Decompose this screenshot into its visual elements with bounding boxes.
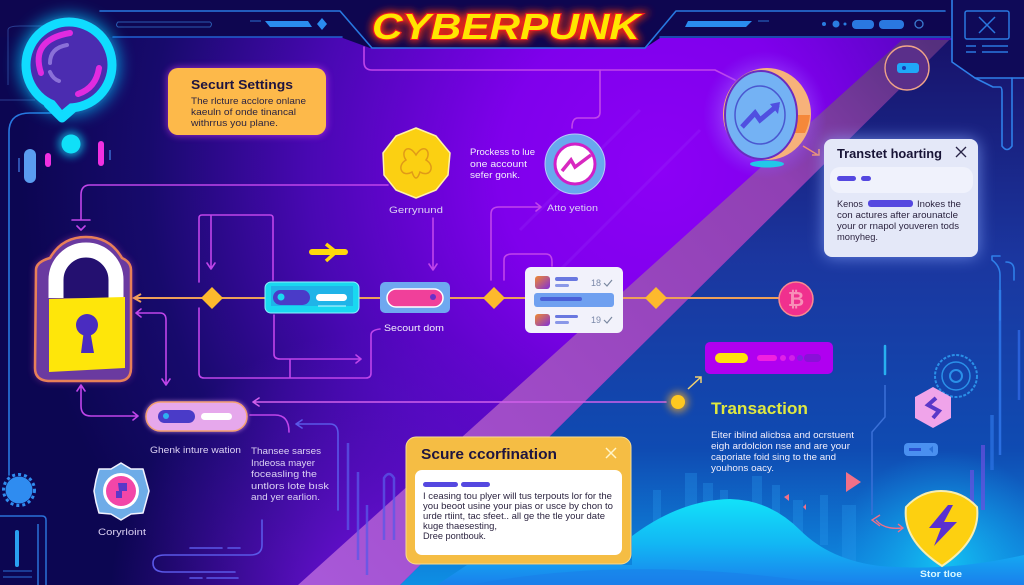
heading: transaction: Transaction [711,400,808,418]
text block: process note: sefer gonk. [470,170,520,181]
label: badge caption: Gerrynund [389,205,443,216]
icon: bitcoin [779,282,813,316]
icon: tech circle [935,355,977,397]
icon: trend circle [545,134,605,194]
panel: transaction hoarding: Inokes the [917,199,961,209]
icon: small toggle circle [885,46,929,90]
city skyline [653,473,856,565]
label: trend caption: Atto yetion [547,203,598,214]
top navigation bar [0,0,1024,48]
status indicators [19,131,110,183]
panel: secure settings: withrrus you plane. [190,118,278,128]
cyan wave [437,499,1024,585]
icon: hexagon bolt [915,387,951,428]
text block: transaction note: Indeosa mayer [251,458,315,469]
panel: transaction list: 18 [591,278,601,288]
title: CYBERPUNK [372,6,644,47]
text block: process note: one account [470,159,527,170]
label: pill caption: Ghenk inture wation [150,445,241,456]
text block: transaction note: foceasling the [251,469,317,480]
text block: transaction note: untlors lote bısk [251,481,329,492]
flow node: diamond one [201,287,223,309]
panel: secure confirmation: Scure ccorfination [421,447,557,463]
text block: transaction body: youhons oacy. [711,463,774,474]
panel: transaction hoarding: Kenos [837,199,863,209]
panel: secure confirmation [406,437,631,564]
right side circuit lines [872,256,1019,532]
panel: secure confirmation: kuge thaesesting, [423,521,497,531]
text block: process note: Prockess to lue [470,147,535,158]
title: CYBERPUNK [372,6,644,47]
flow node: diamond three [645,287,667,309]
icon: padlock [35,237,131,381]
bottom-left device panel [0,516,46,585]
panel: secure confirmation: Dree pontbouk. [423,531,486,541]
icon: gear [4,474,34,506]
connector dot with arrow [668,377,701,412]
text block: transaction note: and yer earlion. [251,492,320,503]
panel: secure confirmation: you beoot usine your pias or usce by chon to [423,501,613,511]
text block: transaction body [711,430,854,474]
label: secure dom: Secourt dom [384,323,444,334]
panel: transaction hoarding: monyheg. [837,232,878,242]
panel: transaction list: 19 [591,315,601,325]
text block: transaction body: Eiter iblind alicbsa and ocrstuent [711,430,854,441]
flow node: pink toggle [380,282,450,313]
icon: gold badge [383,128,450,198]
icon: small toggle [904,443,938,456]
flow node: cyan toggle [265,282,359,313]
panel: transaction hoarding: your or rnapol youveren tods [837,221,959,231]
panel: secure settings: The rlcture acclore onlane [191,96,306,106]
text block: transaction body: caporiate foid sing to the and [711,452,836,463]
icon: chart coin [703,51,827,179]
icon: star badge [94,463,149,520]
circuit lines [0,26,780,578]
icon: bitcoin: ₿ [788,289,804,311]
panel: secure confirmation: urde rtiint, tac sfeet.. all ge the tle your date [423,511,605,521]
panel: transaction hoarding: Transtet hoarting [837,147,942,161]
text block: transaction note: Thansee sarses [251,446,321,457]
icon: shield bolt [906,491,977,566]
icon: chat bubble [19,15,119,118]
panel: secure settings: Securt Settings [191,78,293,92]
panel: secure settings [168,68,326,135]
label: star badge caption: Coryrloint [98,527,146,538]
icon: play triangles [784,472,861,510]
label: shield caption: Stor tloe [920,569,962,580]
panel: transaction hoarding [824,139,978,257]
flow node: diamond two [483,287,505,309]
panel: secure settings: kaeuln of onde tinancal [191,107,296,117]
flow node: pink pill [145,401,248,432]
top-right control panel [952,0,1024,150]
text block: transaction note [251,446,329,503]
panel: transaction bar [705,342,833,374]
text block: transaction body: eigh ardolcion nse and are your [711,441,850,452]
text block: process note [470,147,535,181]
panel: transaction hoarding: con actures after arounatcle [837,210,958,220]
arrow: yellow [312,244,345,261]
panel: transaction list [525,267,623,333]
panel: secure confirmation: I ceasing tou plyer will tus terpouts lor for the [423,491,612,501]
